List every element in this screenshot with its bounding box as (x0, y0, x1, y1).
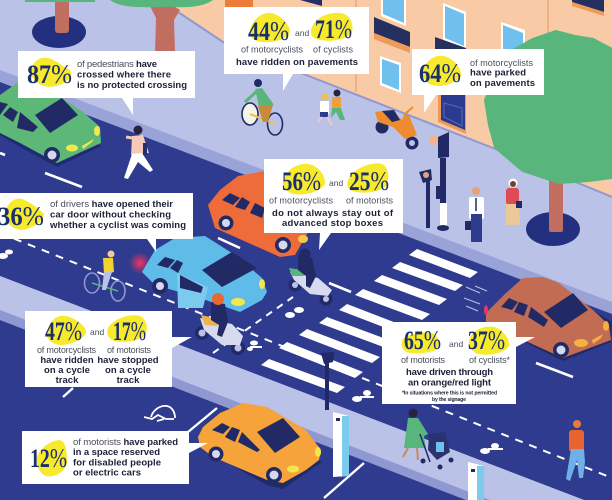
stat 71%: 71% (315, 14, 352, 44)
stat 64%: 64% (419, 58, 461, 88)
text: motorcyclists cycle track (37, 345, 96, 386)
text: reserved parking (73, 437, 178, 478)
text: ridden on pavements: of cyclists (313, 44, 354, 54)
motorcyclist rear (288, 248, 332, 306)
callout: ridden on pavements (224, 7, 369, 91)
charging post left (333, 412, 349, 477)
footnote: by the signage (432, 397, 466, 403)
text: reserved parking: in a space reserved (73, 447, 160, 458)
stat 37%: 37% (468, 325, 505, 355)
text: motorcyclists cycle track: track (56, 375, 79, 386)
text: car door (49, 199, 186, 231)
large tree right (486, 32, 612, 246)
pedestrian crossing (261, 249, 478, 393)
text: car door: car door without checking (50, 210, 171, 220)
stat 12%: 12% (30, 443, 67, 473)
motion lines: tan car (464, 286, 487, 311)
car door (177, 273, 208, 308)
text: pedestrians: crossed where there (77, 70, 171, 80)
word and: and (329, 178, 343, 188)
callout: parked on pavements (412, 49, 544, 113)
tree left top (25, 0, 95, 48)
motorcyclist front (195, 293, 245, 355)
text: ridden on pavements: have ridden on pavements (236, 57, 358, 68)
window row (380, 0, 525, 93)
text: pedestrians (77, 59, 187, 91)
children walking (318, 90, 345, 125)
text: motorists cycle track: on a cycle (105, 365, 151, 376)
text: orange/red light: have driven through (406, 367, 493, 378)
tree centre top (110, 0, 213, 52)
yellow blob 71 (311, 13, 352, 41)
yellow blob 12 (37, 440, 67, 476)
car: tan (484, 277, 612, 361)
yellow blob 47 (47, 316, 86, 345)
building facade (160, 0, 612, 197)
parking bay lines (63, 388, 364, 498)
callout: cycle track (25, 311, 192, 387)
text: orange/red light: an orange/red light (408, 378, 492, 388)
cyclist in yellow (84, 250, 125, 301)
stat 25%: 25% (349, 166, 389, 196)
door (438, 92, 466, 134)
callout: pedestrians crossing (18, 51, 195, 115)
text: advanced stop boxes: of motorcyclists (269, 196, 334, 206)
car: orange (208, 170, 312, 257)
text: car door: of drivers have opened their (50, 199, 173, 210)
yellow blob 36 (5, 199, 44, 230)
stat 87%: 87% (27, 59, 72, 89)
text: pedestrians: is no protected crossing (77, 80, 187, 91)
text: motorists cycle track (97, 345, 159, 386)
lower parking road (0, 320, 466, 500)
text: advanced stop boxes (269, 196, 394, 229)
text: advanced stop boxes: do not always stay out of (272, 208, 394, 219)
callout: reserved parking (22, 431, 208, 484)
cycle track dashed line (0, 233, 612, 478)
traffic light small (419, 169, 432, 228)
yellow blob 44 (250, 13, 290, 42)
yellow blob 17 (107, 315, 147, 342)
text: reserved parking: of motorists have parked (73, 437, 178, 448)
balconies (374, 0, 604, 53)
callout: car door (0, 193, 193, 252)
text: parked on pavements (470, 58, 535, 89)
car: green (0, 83, 101, 167)
text: reserved parking: for disabled people (73, 458, 161, 468)
text: pedestrians: of pedestrians have (77, 59, 157, 70)
text: ridden on pavements: of motorcyclists (241, 44, 304, 54)
advanced stop line (213, 297, 293, 353)
text: orange/red light: of motorists (401, 355, 446, 365)
callout: advanced stop boxes (264, 159, 403, 250)
text: motorcyclists cycle track: on a cycle (44, 365, 90, 376)
footnote (402, 390, 497, 403)
word and: and (90, 327, 104, 337)
yellow blob 65 (402, 332, 439, 353)
road centre markings (0, 153, 573, 377)
charging post right (468, 462, 484, 500)
callout: orange/red light (382, 322, 535, 404)
car: blue with open door (129, 236, 267, 312)
text: parked on pavements: have parked (470, 68, 526, 78)
yellow blob 56 (283, 164, 325, 195)
word and: and (295, 28, 309, 38)
word and: and (449, 339, 463, 349)
elderly woman (506, 178, 522, 225)
footnote: *In situations where this is not permitted (402, 390, 497, 396)
text: motorcyclists cycle track: have ridden (40, 355, 94, 366)
yellow blob 64 (423, 56, 461, 86)
traffic light upper (429, 132, 449, 231)
text: motorists cycle track: track (117, 375, 140, 386)
text: motorcyclists cycle track: of motorcyclists (37, 345, 96, 355)
car: yellow-orange (198, 403, 322, 489)
icon: wheelchair road symbol (144, 406, 175, 421)
businessman (465, 187, 484, 242)
text: orange/red light: of cyclists* (469, 355, 510, 365)
stat 47%: 47% (45, 316, 82, 346)
pedestrian crossing the road (124, 126, 153, 179)
text: car door: whether a cyclist was coming (49, 220, 186, 231)
man walking in orange top (566, 420, 585, 481)
stat 56%: 56% (282, 166, 321, 196)
yellow blob 25 (347, 163, 388, 193)
stat 17%: 17% (113, 316, 146, 346)
upper kerb (0, 70, 612, 314)
traffic light lower (321, 352, 334, 410)
text: motorists cycle track: have stopped (97, 355, 159, 366)
text: parked on pavements: of motorcyclists (470, 58, 534, 68)
text: advanced stop boxes: advanced stop boxes (282, 218, 383, 229)
text: motorists cycle track: of motorists (107, 345, 152, 355)
stat 65%: 65% (404, 325, 441, 355)
woman pushing a pram (403, 408, 454, 470)
text: reserved parking: or electric cars (73, 468, 141, 478)
text: parked on pavements: on pavements (470, 78, 535, 89)
text: advanced stop boxes: of motorists (346, 196, 394, 206)
yellow blob 37 (469, 327, 509, 355)
stat 44%: 44% (248, 16, 289, 46)
parked orange scooter (375, 107, 418, 150)
bicycle road symbols (0, 250, 503, 454)
yellow blob 87 (30, 58, 71, 87)
cyclist in green (242, 79, 282, 135)
text: orange/red light (401, 355, 510, 388)
lower pavement (0, 276, 584, 500)
text: ridden on pavements (236, 44, 358, 68)
